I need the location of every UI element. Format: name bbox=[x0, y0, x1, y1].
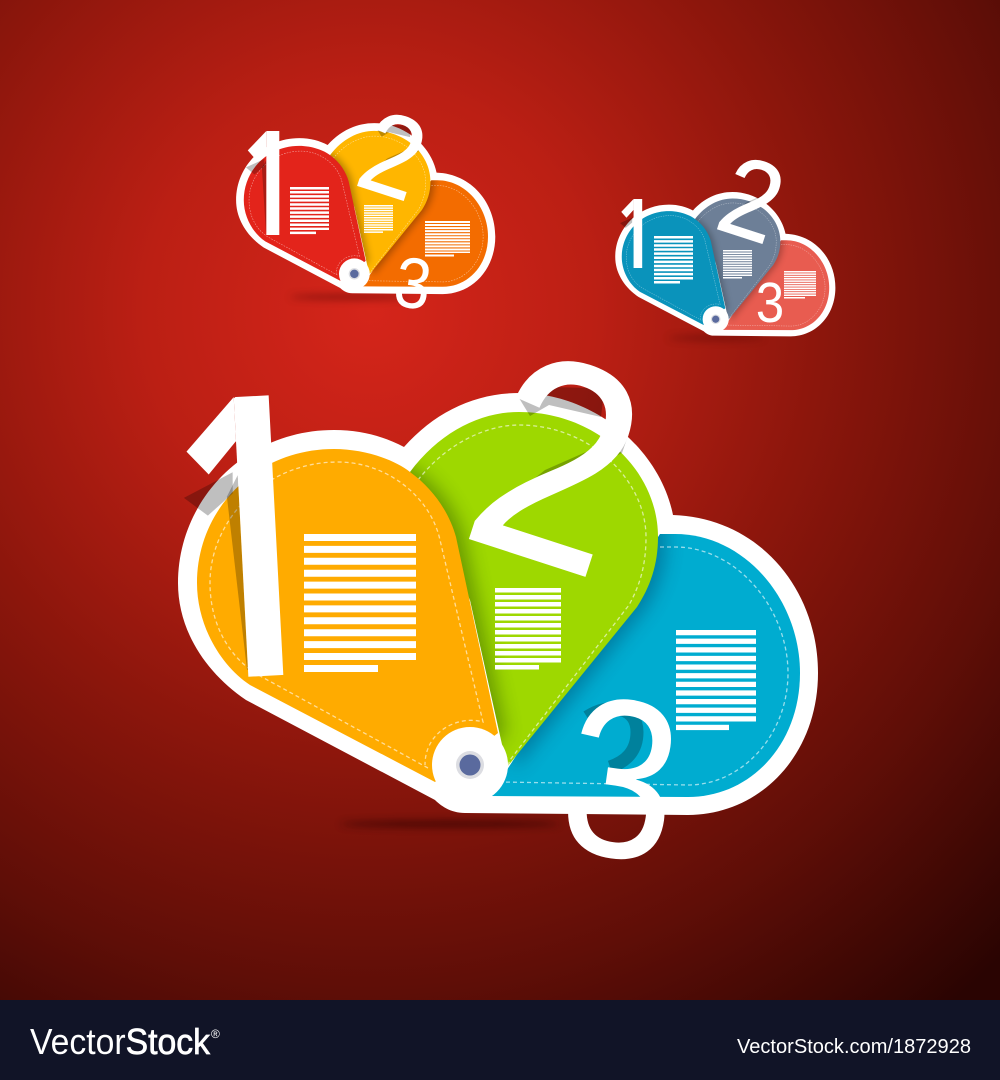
text lines: coral petal bbox=[784, 271, 805, 298]
numeral 3: 3 bbox=[390, 242, 436, 326]
cloud shape: red, yellow, orange petals bbox=[236, 123, 495, 294]
numeral 1: 1 bbox=[126, 291, 378, 816]
numeral 3: 3 bbox=[548, 645, 695, 912]
text lines: orange petal bbox=[304, 534, 378, 672]
panel: small blue cloud bbox=[615, 160, 836, 336]
blue petal stitching bbox=[500, 547, 788, 785]
numeral 1: 1 bbox=[228, 94, 312, 285]
shadow: small red cloud bbox=[290, 294, 410, 300]
green petal stitching bbox=[418, 425, 646, 780]
numeral 2: 2 bbox=[438, 287, 678, 638]
petal: green bbox=[410, 412, 658, 767]
footer logo: VectorStock bbox=[30, 1021, 211, 1062]
registered mark: ® bbox=[211, 1027, 220, 1041]
numeral 2: 2 bbox=[705, 130, 799, 268]
footer bar bbox=[0, 1000, 1000, 1080]
panel: large cloud bbox=[178, 361, 818, 860]
text lines: red petal bbox=[290, 187, 316, 234]
shadow: small blue cloud bbox=[668, 336, 764, 340]
text lines: blue petal bbox=[676, 630, 729, 730]
petal: orange bbox=[197, 449, 498, 782]
green petal shading bbox=[410, 462, 514, 746]
text lines: blue petal bbox=[654, 236, 680, 284]
orange petal stitching bbox=[210, 462, 483, 768]
footer image id: VectorStock.com/1872928 bbox=[737, 1036, 971, 1058]
blue petal shading bbox=[510, 534, 674, 768]
panel: small red cloud bbox=[236, 114, 496, 309]
text lines: yellow petal bbox=[364, 205, 383, 233]
numeral 1 bbox=[620, 199, 642, 268]
numeral 1: 1 bbox=[608, 175, 664, 301]
text lines: orange petal bbox=[425, 221, 454, 256]
numeral 1 bbox=[246, 131, 280, 235]
shadow: large cloud bbox=[340, 820, 560, 828]
text lines: green petal bbox=[495, 588, 539, 670]
white cloud outline bbox=[178, 393, 818, 815]
numeral 3: 3 bbox=[756, 272, 784, 335]
petal: blue bbox=[490, 534, 800, 797]
numeral 2: 2 bbox=[345, 86, 440, 226]
cloud shape: blue, slate, coral petals bbox=[615, 192, 835, 336]
text lines: slate petal bbox=[723, 250, 742, 278]
numeral 1 bbox=[184, 395, 284, 677]
hub rivet bbox=[432, 727, 508, 803]
